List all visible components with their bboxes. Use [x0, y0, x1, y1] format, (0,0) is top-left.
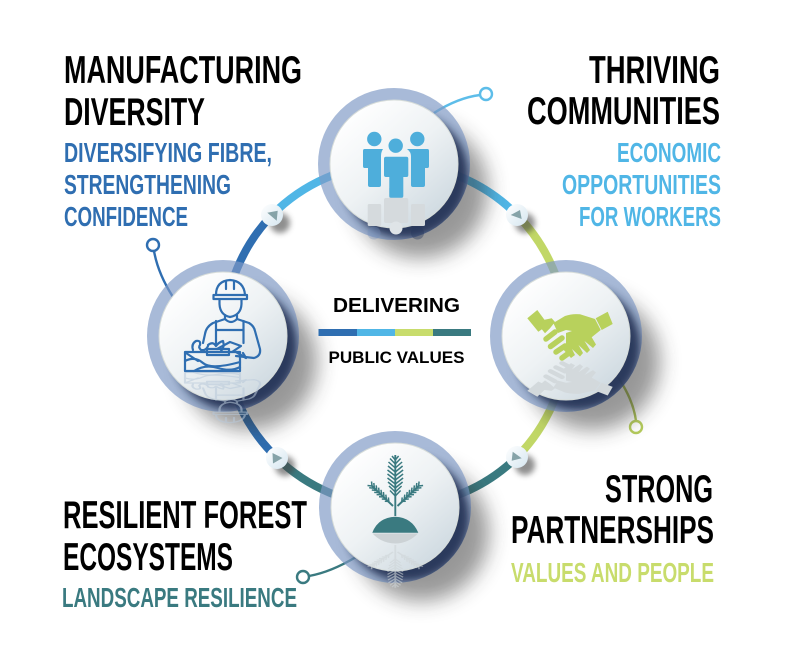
icon: seedling [368, 455, 423, 533]
heading: resilient forest ecosystems [63, 494, 307, 579]
heading: manufacturing diversity [64, 49, 302, 134]
icon: reflection of worker [185, 373, 260, 423]
leader end: resilient forest ecosystems [297, 571, 309, 583]
heading: resilient forest ecosystems: ECOSYSTEMS [63, 536, 233, 579]
leader line: thriving communities [434, 95, 480, 113]
heading: manufacturing diversity: DIVERSITY [64, 91, 205, 134]
leader end: thriving communities [480, 88, 492, 100]
icon: reflection of people [368, 188, 425, 240]
leader end: strong partnerships [630, 421, 642, 433]
text: economic opportunities: OPPORTUNITIES [562, 169, 721, 200]
leader end: manufacturing diversity [147, 239, 159, 251]
center subtitle: public values: PUBLIC VALUES [328, 348, 464, 367]
text: economic opportunities: FOR WORKERS [579, 201, 721, 232]
heading: resilient forest ecosystems: RESILIENT FOREST [63, 494, 307, 537]
heading: manufacturing diversity: MANUFACTURING [64, 49, 302, 92]
text: diversifying fibre: DIVERSIFYING FIBRE, [64, 137, 272, 168]
heading: thriving communities: THRIVING [589, 49, 720, 92]
center color bar [318, 329, 471, 336]
leader line: resilient forest ecosystems [309, 557, 356, 576]
text: landscape resilience: LANDSCAPE RESILIENCE [62, 582, 297, 613]
center title: delivering: DELIVERING [333, 295, 460, 317]
icon: people [363, 132, 429, 198]
leader line: manufacturing diversity [154, 251, 173, 297]
node: strong partnerships [490, 260, 660, 430]
text: diversifying fibre: CONFIDENCE [64, 201, 188, 232]
marker: lower left [266, 447, 295, 476]
leader line: strong partnerships [618, 377, 636, 421]
text: economic opportunities [562, 137, 721, 232]
icon: reflection of seedling [368, 534, 423, 588]
marker: lower right [506, 446, 535, 475]
ring: green segment [517, 215, 567, 457]
ring: light blue segment [272, 164, 517, 215]
icon: handshake [527, 310, 613, 358]
ring: dark blue segment [224, 215, 277, 458]
node: manufacturing diversity [147, 260, 317, 430]
heading: thriving communities: COMMUNITIES [527, 90, 720, 133]
icon: reflection of handshake [527, 363, 613, 397]
marker: upper right [506, 204, 535, 233]
marker: upper left [261, 204, 290, 233]
node: resilient forest ecosystems [319, 431, 489, 601]
heading: strong partnerships [511, 468, 714, 552]
icon: worker [185, 280, 260, 371]
ring: teal segment [277, 457, 517, 506]
heading: strong partnerships: STRONG [605, 468, 713, 511]
heading: thriving communities [527, 49, 720, 133]
node: thriving communities [318, 88, 488, 258]
text: economic opportunities: ECONOMIC [617, 137, 721, 168]
text: diversifying fibre: STRENGTHENING [64, 169, 231, 200]
text: diversifying fibre [64, 137, 272, 232]
